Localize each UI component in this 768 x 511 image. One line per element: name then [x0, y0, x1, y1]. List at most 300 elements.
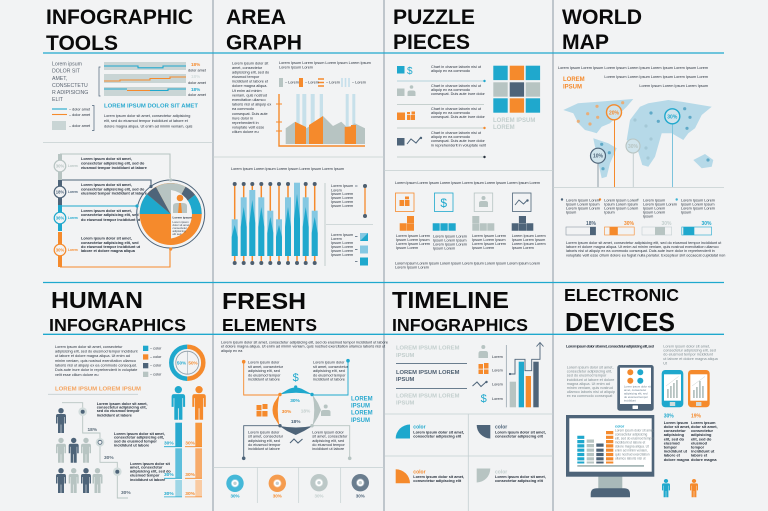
text blocks: do eiusmod tempor — [248, 374, 281, 378]
pie chart with person: Lorem ipsum — [172, 220, 189, 224]
heading: human infographics: INFOGRAPHICS — [49, 315, 186, 335]
text blocks: incididunt ut labore — [313, 377, 345, 381]
timeline text blocks: Lorem ipsum dolor sit amet, — [81, 209, 132, 213]
text blocks: do eiusmod tempor — [312, 443, 346, 447]
color card: teal: Lorem ipsum dolor sit amet, — [413, 430, 464, 434]
line chart bands — [99, 62, 186, 96]
progress bars: 18% — [586, 221, 597, 227]
heading: puzzle pieces: PIECES — [393, 30, 470, 54]
panel: world map — [558, 5, 725, 257]
progress bars: 30% — [624, 221, 635, 227]
text blocks: adipisicing elit, sed — [312, 439, 344, 443]
row 2: person: Chart in chance laborin nisi ut — [431, 84, 482, 88]
bar chart legend: Lorem Ipsum — [331, 184, 353, 188]
panel: puzzle pieces — [393, 5, 546, 270]
intro text: CONSECTETU — [52, 83, 88, 89]
teal callout: LOREM — [351, 396, 373, 402]
bottom text: Lorem Ipsum Lorem Ipsum Lorem Ipsum Lorem Ipsum Lorem Ipsum Lorem Ipsum Lorem — [395, 262, 540, 266]
left paragraph: eiusmod tempor — [232, 75, 260, 79]
text blocks — [248, 360, 349, 451]
bar chart legend: Ipsum Lorem — [331, 241, 353, 245]
monitor: quis nostrud exercitation — [615, 452, 650, 456]
timeline text blocks: consectetur adipisicing elit, sed — [81, 241, 139, 245]
column texts: Lorem Ipsum Lorem — [472, 234, 506, 238]
framed icon: orange — [396, 193, 414, 231]
icon column — [472, 345, 503, 405]
timeline stem with percentage circles: 18% — [56, 190, 64, 194]
timeline texts: consectetur adipisicing elit, — [114, 436, 164, 440]
pie chart with person: dolor sit amet — [172, 223, 190, 227]
left paragraph: reprehenderit in — [232, 121, 259, 125]
bar chart legend: Ipsum Lorem — [331, 253, 353, 257]
center diagram: 30% — [290, 398, 301, 404]
legend columns: Lorem Ipsum Lorem — [604, 198, 638, 202]
icon: trend — [290, 439, 302, 443]
center diagram: 18% — [301, 408, 311, 414]
chart legend: – dolor amet — [69, 124, 91, 128]
timeline text blocks: do eiusmod tempor incididunt ut — [81, 245, 141, 249]
timeline texts: Lorem ipsum dolor sit — [130, 462, 171, 466]
panel: fresh elements — [213, 288, 388, 503]
bar chart legend — [325, 183, 373, 266]
grid caption: LOREM — [493, 125, 515, 131]
timeline texts: incididunt ut labore — [130, 478, 165, 482]
color legend: – color — [150, 364, 162, 368]
grid caption: LOREM IPSUM — [493, 118, 535, 124]
panel: human infographics — [48, 287, 206, 498]
chart legend — [52, 106, 94, 130]
row 3: boxes — [397, 107, 486, 129]
timeline text blocks: eiusmod tempor incididunt ut labore — [81, 166, 147, 170]
timeline stem with percentage circles: Lorem — [68, 248, 78, 252]
left paragraph: irure dolor in — [232, 116, 253, 120]
color legend — [143, 346, 162, 377]
world map shapes — [563, 99, 713, 178]
pin: 30 percent gray: 30% — [628, 144, 639, 150]
legend columns: Ipsum Lorem Ipsum — [681, 202, 715, 206]
legend columns: Ipsum — [566, 210, 576, 214]
chart value labels: 18% — [191, 74, 200, 79]
person icon: teal — [662, 479, 670, 497]
timeline captions: LOREM IPSUM LOREM — [396, 370, 460, 376]
timeline text blocks — [81, 157, 147, 253]
phone text left: dolor sit amet, — [664, 424, 690, 429]
phone text right: tempor — [691, 444, 705, 450]
phone text right: incididunt ut — [691, 448, 715, 454]
teal person column: 30% — [164, 440, 174, 446]
color card: dark: color — [495, 424, 507, 430]
timeline texts — [97, 402, 171, 482]
gray text right: consectetur adipisicing elit, sed — [663, 348, 716, 352]
paragraph: ut labore et dolore magna aliqua. Ut enim ad — [55, 354, 130, 358]
disc: dark: 30% — [356, 494, 365, 498]
icon column: Lorem — [492, 368, 503, 372]
gray text right: ut labore et dolore magna aliqua — [663, 357, 719, 361]
heading: puzzle pieces — [393, 5, 475, 54]
color card: orange: color — [413, 470, 426, 476]
row 4: trend line: Chart in chance laborin nisi ut — [431, 131, 482, 135]
legend columns: Lorem Ipsum Lorem — [681, 206, 715, 210]
framed icon: teal: $ — [440, 196, 447, 210]
pin: 30 percent gray — [626, 139, 640, 187]
chart value labels: dolor amet — [188, 68, 207, 72]
timeline stem with percentage circles: Lorem — [68, 190, 78, 194]
color card: teal: consectetur adipiscing elit — [413, 434, 462, 438]
row 1: dollar: Chart in chance laborin nisi ut — [431, 65, 482, 69]
phone text right: eiusmod — [691, 440, 708, 445]
phone: teal — [662, 370, 683, 407]
intro text: Lorem ipsum — [52, 62, 82, 68]
progress bars: 30% — [661, 221, 672, 227]
column texts: Ipsum Lorem Ipsum — [433, 238, 467, 242]
timeline texts: Lorem ipsum dolor sit amet, — [97, 402, 148, 406]
row 4: trend line: aliquip ex ea commodo — [431, 135, 470, 139]
column texts: Lorem Ipsum Lorem — [512, 234, 546, 238]
icon: boxes — [256, 404, 268, 416]
text blocks: sit amet, consectetur — [248, 435, 284, 439]
teal callout: IPSUM — [351, 404, 370, 410]
paragraph: Lorem ipsum dolor sit amet, consectetur adipisicing elit, sed do eiusmod tempor incididunt ut labore — [221, 340, 388, 344]
color card: gray: Lorem ipsum dolor sit amet, — [495, 475, 546, 479]
column texts: Ipsum Lorem — [472, 246, 494, 250]
pie chart with person — [135, 178, 205, 251]
column texts: Ipsum Lorem — [396, 246, 418, 250]
paragraph: Lorem ipsum dolor sit amet, consectetur adipisicing — [104, 114, 190, 118]
heading: timeline infographics: TIMELINE — [392, 287, 509, 313]
bold lead line: Lorem ipsum dolor sit amet, consectetur adipisicing elit, sed — [566, 344, 655, 348]
subheading: LOREM IPSUM DOLOR SIT AMET — [104, 104, 199, 110]
column texts: Ipsum Lorem Ipsum — [472, 238, 506, 242]
bar chart legend: Ipsum Lorem — [331, 245, 353, 249]
top text: Lorem Ipsum Lorem Ipsum Lorem Ipsum Lorem Ipsum — [279, 61, 371, 65]
center diagram: 18% — [291, 419, 301, 425]
monitor — [566, 415, 655, 497]
area legend: – Lorem — [305, 80, 319, 84]
phone text left: Lorem ipsum — [664, 420, 689, 425]
legend columns: Ipsum Lorem — [643, 206, 665, 210]
column texts: Ipsum Lorem — [433, 246, 455, 250]
monitor: dolore magna aliqua. Ut — [615, 444, 649, 448]
donut chart: 50% — [188, 360, 198, 366]
disc: teal: 30% — [230, 494, 240, 498]
timeline captions: IPSUM — [396, 400, 415, 406]
color legend: – color — [150, 346, 162, 350]
gray text left: consectetur adipisicing elit, — [567, 370, 612, 374]
left paragraph: incididunt ut labore et — [232, 80, 269, 84]
column texts: Ipsum Lorem Ipsum — [396, 238, 430, 242]
gray text left: minim veniam, quis nostrud — [567, 386, 613, 390]
bar chart with arrow — [506, 342, 544, 407]
heading: area graph: GRAPH — [226, 30, 302, 54]
paragraph: minim veniam, quis nostrud exercitation ullamco — [55, 359, 136, 363]
bar chart legend: Ipsum Lorem — [331, 196, 353, 200]
monitor: elit, sed do eiusmod tempor — [615, 436, 655, 440]
right-aligned text: Lorem Ipsum Lorem Ipsum Lorem Ipsum Lorem Ipsum Lorem Ipsum Lorem Ipsum Lorem — [558, 66, 708, 70]
phone text right: dolore magna — [691, 457, 717, 462]
gray text right: Lorem ipsum dolor sit amet, — [663, 344, 710, 348]
legend columns — [561, 198, 715, 218]
chart legend: – dolor amet — [69, 113, 91, 117]
left paragraph: ea commodo — [232, 107, 254, 111]
row 3: boxes: Chart in chance laborin nisi ut — [431, 107, 482, 111]
chart legend: – dolor amet — [69, 108, 91, 112]
tablet: amet, consectetur — [624, 388, 646, 392]
column texts: Lorem Ipsum Lorem — [433, 234, 467, 238]
range bar chart — [232, 182, 318, 265]
monitor: incididunt ut labore et — [615, 440, 645, 444]
timeline stem with percentage circles: Lorem — [68, 164, 78, 168]
text blocks: incididunt ut labore — [248, 377, 280, 381]
color card: gray — [477, 468, 546, 483]
text blocks: do eiusmod tempor — [248, 443, 281, 447]
paragraph: adipisicing elit, sed do eiusmod tempor incididunt — [55, 350, 138, 354]
area legend — [279, 78, 366, 87]
orange person column: 30% — [185, 472, 196, 478]
heading: electronic devices: DEVICES — [565, 309, 675, 337]
pie chart with person: elit sed — [172, 232, 182, 236]
gray text left: ullamco laboris nisi ut aliquip — [567, 390, 615, 394]
icon column: Lorem — [492, 355, 503, 359]
text blocks: incididunt ut labore — [312, 447, 344, 451]
timeline texts: sed do eiusmod tempor — [97, 409, 140, 413]
color card: gray: color — [495, 470, 507, 476]
stepped timeline: 30% — [104, 455, 114, 461]
disc: gray: 30% — [314, 494, 324, 498]
timeline text blocks: do eiusmod tempor incididunt ut — [81, 218, 141, 222]
chart value labels: 18% — [191, 62, 200, 67]
row 2: person — [397, 84, 486, 104]
timeline text blocks: labore et dolore magna aliqua — [81, 249, 136, 253]
row 1: dollar — [397, 65, 486, 82]
pin: 20 percent: 20% — [609, 110, 620, 116]
disc: orange — [269, 475, 286, 498]
color card: gray: consectetur adipiscing elit — [495, 479, 544, 483]
chart value labels: dolor amet — [188, 81, 207, 85]
paragraph: laboris nisi ut aliquip ex ea commodo consequat. Duis aute irure dolor in reprehenderit in — [566, 249, 715, 253]
right-aligned text: Lorem Ipsum Lorem Ipsum Lorem Ipsum — [639, 84, 708, 88]
panel: infographic tools — [46, 5, 207, 267]
phone text left: consectetur — [664, 428, 686, 433]
chart value labels: dolor amet — [188, 93, 207, 97]
column texts: Lorem Ipsum Lorem — [396, 242, 430, 246]
paragraph: et dolore magna aliqua. Ut enim ad minim veniam, quis nostrud exercitation ullamco laboris nisi ut — [221, 345, 386, 349]
area legend: – Lorem — [352, 80, 366, 84]
timeline text blocks: consectetur adipisicing elit, sed — [81, 213, 139, 217]
text blocks: sit amet, consectetur — [312, 435, 348, 439]
teal person column — [164, 386, 185, 497]
icon column: $ — [481, 393, 487, 405]
paragraph: aliquip ex ea — [221, 349, 243, 353]
phone text left: elit, sed do — [664, 436, 685, 441]
phone text left: dolore magna — [664, 457, 690, 462]
timeline texts: amet, consectetur — [130, 466, 163, 470]
center diagram: 30% — [282, 409, 292, 415]
chart value labels: 18% — [191, 87, 200, 92]
text blocks: adipisicing elit, sed — [248, 439, 280, 443]
legend columns: Ipsum — [681, 210, 691, 214]
area legend: – Lorem — [285, 80, 299, 84]
timeline text blocks: Lorem ipsum dolor sit amet, — [81, 183, 132, 187]
heading: fresh elements: ELEMENTS — [222, 315, 317, 335]
gray text left: sed do eiusmod tempor — [567, 374, 607, 378]
color card: dark — [477, 424, 546, 438]
panel: timeline infographics — [385, 287, 553, 511]
orange subheading: LOREM IPSUM LOREM IPSUM — [55, 387, 141, 393]
timeline texts: eiusmod tempor — [130, 474, 160, 478]
bar chart heading: Lorem Ipsum Lorem Ipsum Lorem Ipsum Lorem Ipsum Lorem Ipsum — [231, 167, 344, 171]
heading: timeline infographics — [392, 287, 528, 335]
tablet — [617, 365, 654, 411]
timeline text blocks: consectetur adipisicing elit, sed do — [81, 188, 145, 192]
text blocks: Lorem ipsum dolor — [248, 360, 280, 364]
timeline texts: incididunt ut labore — [114, 444, 149, 448]
disc: teal — [226, 475, 244, 498]
row 1: dollar: aliquip ex ea commodo — [431, 69, 470, 73]
area chart — [276, 94, 365, 146]
gray text left: magna aliqua. Ut enim ad — [567, 382, 610, 386]
phone text right: dolor sit amet, — [691, 424, 718, 429]
heading: area graph — [226, 5, 302, 54]
row 2: person: aliquip ex ea commodo — [431, 88, 470, 92]
tablet: adipisicing elit, sed — [624, 392, 648, 396]
row 2: person: consequat. Duis aute irure dolor — [431, 92, 486, 96]
pie chart with person: adipisicing — [172, 229, 186, 233]
text blocks: Lorem ipsum dolor — [313, 360, 345, 364]
connector end dots — [242, 359, 352, 460]
grid dividers — [213, 0, 553, 511]
gray text left: incididunt ut labore et dolore — [567, 378, 614, 382]
bottom text: Lorem Ipsum Lorem — [395, 266, 429, 270]
phone text left: eiusmod — [664, 440, 680, 445]
legend columns: Lorem Ipsum Lorem — [566, 206, 600, 210]
left paragraph: voluptate velit esse — [232, 126, 264, 130]
phone text left: incididunt ut — [664, 448, 688, 454]
map markers — [577, 101, 710, 170]
icon column: Lorem — [492, 397, 503, 401]
teal person column: 30% — [164, 472, 174, 478]
phone text left: labore et — [664, 452, 681, 458]
puzzle grid — [493, 66, 540, 113]
teal person column: 30% — [164, 491, 174, 497]
intro text: R ADIPISICING — [52, 90, 88, 96]
heading: human infographics: HUMAN — [51, 287, 143, 313]
people icons — [56, 408, 102, 493]
timeline texts: sed do eiusmod tempor — [114, 440, 157, 444]
timeline texts: Lorem ipsum dolor sit amet, — [114, 432, 165, 436]
color card: teal: color — [413, 424, 426, 430]
paragraph: dolore magna aliqua. Ut enim ad minim veniam, quis — [104, 124, 193, 128]
tablet: do eiusmod tempor — [624, 395, 648, 399]
color card: dark: Lorem ipsum dolor sit amet, — [495, 430, 546, 434]
progress bars: 30% — [701, 221, 712, 227]
timeline text blocks: consectetur adipisicing elit, sed do — [81, 162, 145, 166]
phone text right: adipisicing — [691, 432, 712, 437]
phone stats: 19% — [691, 414, 702, 420]
color card: orange — [396, 469, 464, 483]
text blocks: Lorem ipsum dolor — [248, 430, 280, 434]
person icon: orange — [690, 479, 698, 497]
left paragraph: dolore magna aliqua. — [232, 84, 267, 88]
phone text left: tempor — [664, 444, 677, 450]
legend columns: Ipsum Lorem Ipsum — [604, 202, 638, 206]
heading: infographic tools: TOOLS — [46, 31, 118, 55]
paragraph: voluptate velit esse cillum dolore eu fugiat nulla pariatur. Excepteur sint occaecat cupidatat non — [566, 253, 725, 257]
pin: 30 percent teal — [665, 109, 680, 187]
pin: 20 percent — [606, 105, 622, 187]
progress bars — [566, 221, 712, 235]
gray text right: do eiusmod tempor incididunt — [663, 352, 714, 356]
legend columns: Lorem Ipsum Lorem — [681, 198, 715, 202]
row 4: trend line: consequat. Duis aute irure dolor — [431, 139, 486, 143]
left paragraph: cillum dolore eu — [232, 130, 259, 134]
gray text left: ex ea commodo consequat — [567, 394, 613, 398]
donut chart — [171, 347, 203, 379]
intro text: AMET, — [52, 76, 67, 82]
disc: orange: 30% — [273, 494, 282, 498]
tablet: incididunt — [624, 398, 636, 402]
orange person column — [185, 386, 206, 497]
paragraph: labore et dolore magna aliqua. Ut enim ad minim veniam, quis nostrud exercitation ullamco — [566, 245, 719, 249]
color card: orange: Lorem ipsum dolor sit amet, — [413, 475, 464, 479]
heading: electronic devices: ELECTRONIC — [564, 285, 679, 305]
timeline text blocks: Lorem ipsum dolor sit amet, — [81, 236, 132, 240]
pin: 10 percent — [590, 148, 606, 187]
column texts: Lorem Ipsum Lorem — [512, 242, 546, 246]
text blocks: incididunt ut labore — [248, 447, 280, 451]
top text: Lorem Ipsum Lorem — [279, 66, 313, 70]
column texts: Lorem Ipsum Lorem — [433, 242, 467, 246]
center diagram — [272, 385, 321, 435]
heading: area graph: AREA — [226, 5, 286, 29]
bar chart legend: Ipsum Lorem — [331, 204, 353, 208]
timeline captions: IPSUM — [396, 353, 415, 359]
area legend: – Lorem — [326, 80, 340, 84]
bar chart legend: Lorem — [331, 237, 342, 241]
framed icon: teal — [433, 193, 456, 231]
text blocks: adipisicing elit, sed — [248, 369, 280, 373]
phone text right: Lorem ipsum — [691, 420, 716, 425]
legend columns: Lorem Ipsum Lorem — [604, 206, 638, 210]
timeline texts: consectetur adipisicing elit, — [97, 406, 147, 410]
framed icon: gray — [472, 193, 494, 231]
left paragraph: exercitation ullamco — [232, 98, 266, 102]
row 4: trend line: in reprehenderit in voluptate velit — [431, 144, 487, 148]
gray text right: Ut — [663, 362, 668, 366]
color legend: – color — [150, 355, 162, 359]
teal callout: LOREM — [351, 411, 373, 417]
stepped timeline: 30% — [121, 490, 131, 496]
column texts: Lorem Ipsum Lorem — [472, 242, 506, 246]
paragraph: elit, sed do eiusmod tempor incididunt ut labore et — [104, 119, 189, 123]
bar chart legend: Ipsum Lorem — [331, 200, 353, 204]
legend columns: Lorem Ipsum Lorem — [566, 198, 600, 202]
orange subheading: IPSUM — [563, 84, 582, 90]
pie chart with person: consectetur — [172, 226, 187, 230]
connectors — [244, 361, 350, 458]
icon: dollar: $ — [293, 372, 299, 384]
monitor bar chart — [577, 431, 644, 467]
left paragraph: Lorem ipsum dolor sit — [232, 62, 269, 66]
phone text left: adipisicing — [664, 432, 685, 437]
left paragraph: consequat. Duis aute — [232, 112, 268, 116]
monitor: Lorem ipsum dolor sit amet, — [615, 428, 654, 432]
legend columns: Ipsum Lorem — [643, 210, 665, 214]
panel: electronic devices — [564, 285, 719, 497]
row 3: boxes: aliquip ex ea commodo — [431, 111, 470, 115]
left paragraph: veniam, quis nostrud — [232, 93, 267, 97]
text blocks: sit amet, consectetur — [313, 365, 349, 369]
pin: 10 percent: 10% — [593, 154, 604, 160]
